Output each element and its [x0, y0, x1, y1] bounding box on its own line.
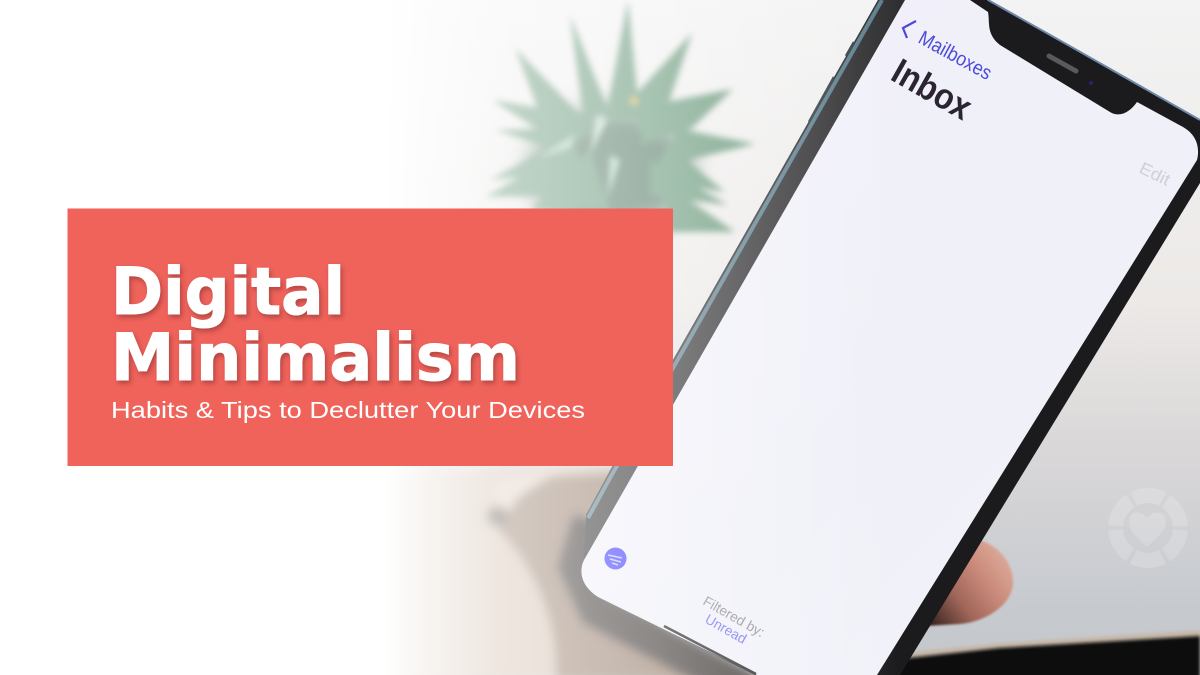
unread label: Unread	[703, 611, 750, 647]
watermark logo	[1116, 496, 1180, 560]
home indicator	[664, 626, 756, 674]
panel background	[68, 208, 673, 466]
side buttons	[809, 42, 854, 122]
soft lower-left phone edge	[576, 520, 750, 675]
title panel	[68, 208, 673, 466]
phone screen	[581, 0, 1198, 675]
hand holding phone	[385, 466, 710, 675]
phone side edge highlight	[588, 0, 882, 518]
back chevron	[903, 21, 916, 38]
title line two: Minimalism	[111, 321, 520, 396]
finger behind phone	[925, 539, 1013, 626]
subtitle: Habits & Tips to Declutter Your Devices	[111, 397, 585, 423]
earpiece speaker	[1049, 56, 1076, 71]
inbox heading: Inbox	[885, 50, 979, 128]
edit link: Edit	[1136, 159, 1174, 190]
plant	[485, 0, 755, 232]
logo heart	[1129, 512, 1166, 547]
filter button	[604, 548, 626, 570]
phone top edge highlight	[988, 0, 1200, 120]
title line one: Digital	[111, 255, 345, 330]
left side grey bezel tint	[584, 0, 905, 560]
front camera dot	[1089, 81, 1093, 85]
phone body and bezel	[586, 0, 1200, 675]
logo ring segments	[1116, 496, 1180, 560]
mailboxes link: Mailboxes	[915, 27, 995, 85]
phone	[581, 0, 1200, 675]
filtered by label: Filtered by:	[701, 593, 768, 640]
background photo backdrop	[380, 0, 1200, 675]
